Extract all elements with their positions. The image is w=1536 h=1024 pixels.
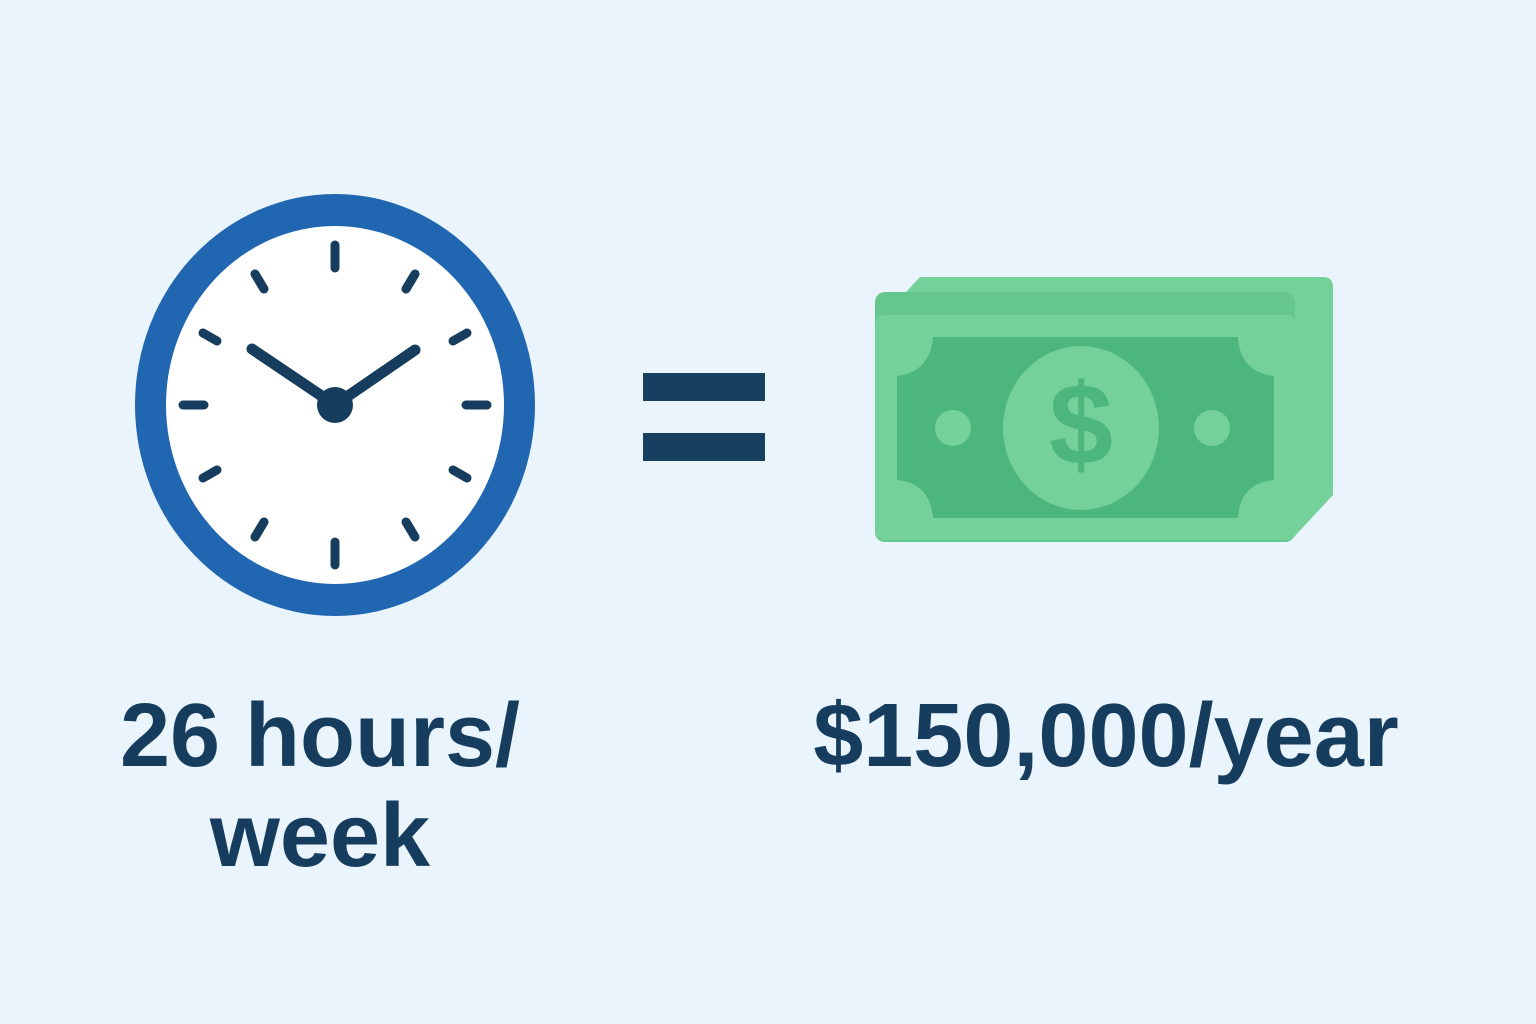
clock face [135, 194, 535, 616]
equals sign [643, 373, 765, 461]
text: hours: week [210, 786, 430, 886]
icon: money stack: $ [1049, 361, 1113, 489]
text: hours [120, 686, 520, 886]
icon: money stack [875, 277, 1333, 542]
text: salary: $150,000/year [813, 686, 1399, 786]
text: hours: 26 hours/ [120, 686, 520, 786]
